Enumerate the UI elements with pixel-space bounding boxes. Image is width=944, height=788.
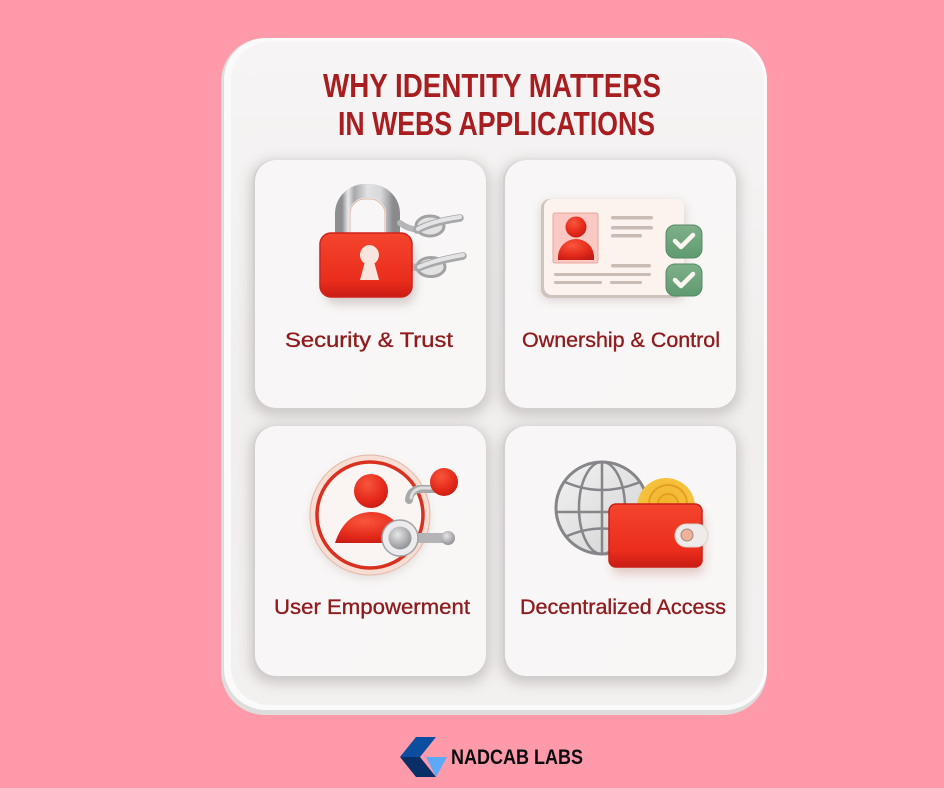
icon: logo mark	[400, 737, 447, 777]
panel: decentralized access	[500, 426, 740, 684]
main panel	[221, 38, 767, 715]
icon: globe	[556, 462, 648, 554]
icon: gold coin	[637, 478, 695, 536]
title: IN WEBS APPLICATIONS	[338, 105, 655, 142]
icon: user with toggles	[310, 455, 458, 578]
icon: check badge bottom	[666, 264, 702, 296]
panel: security and trust	[250, 160, 490, 416]
icon: check badge top	[666, 225, 702, 258]
panel: ownership and control	[500, 160, 740, 416]
wordmark: NADCAB LABS	[451, 746, 583, 769]
panel: user empowerment	[250, 426, 490, 684]
icon: padlock with chains	[320, 191, 463, 304]
icon: identity card with checks	[541, 199, 702, 300]
label: user empowerment: User Empowerment	[274, 596, 470, 619]
title: WHY IDENTITY MATTERS	[323, 67, 661, 104]
label: ownership and control: Ownership & Control	[522, 329, 720, 352]
icon: globe and wallet	[556, 462, 708, 574]
icon: wallet	[609, 504, 708, 567]
logo: nadcab labs	[400, 737, 583, 777]
label: security and trust: Security & Trust	[285, 329, 453, 352]
title	[323, 67, 661, 142]
label: decentralized access: Decentralized Access	[520, 596, 726, 619]
